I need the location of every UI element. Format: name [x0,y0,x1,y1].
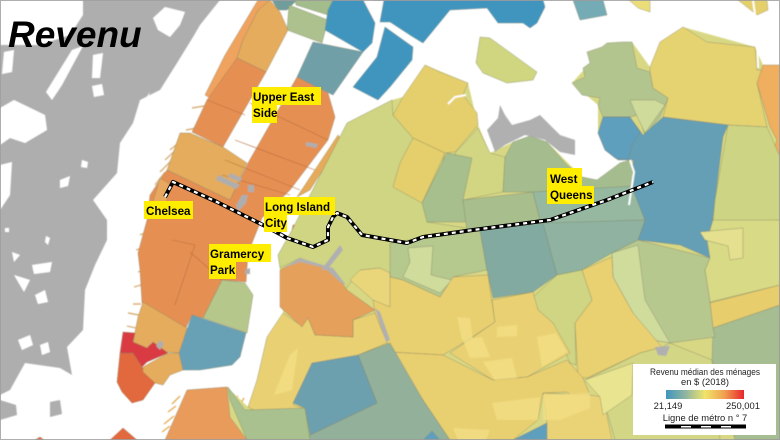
label: Upper East Side [252,87,321,123]
metro line legend: Ligne de métro n ° 7 [663,412,747,423]
river: Newtown Creek and East River inlet [448,0,758,104]
land underlay: Queens and Brooklyn [165,27,780,440]
label: West Queens: Queens [550,189,593,202]
piers: Manhattan west side [127,106,252,432]
label: West Queens: West [550,173,578,186]
title: Revenu [8,14,142,55]
label: Chelsea: Chelsea [146,205,191,218]
legend [633,364,776,435]
ramp maximum: 250,001 [726,400,760,411]
label: Long Island City: Long Island [265,201,330,214]
label: Gramercy Park [209,244,271,279]
metro line no. 7 [165,182,653,247]
districts: Manhattan [117,0,342,403]
legend subtitle: en $ (2018) [681,376,729,387]
label: Gramercy Park: Park [210,264,236,277]
label: Upper East Side: Upper East [253,91,314,104]
districts: Bronx [272,0,768,100]
district lines: Manhattan [172,100,328,305]
land: New Jersey (grey) [0,0,220,420]
legend title: Revenu médian des ménages [650,366,760,377]
label: Long Island City: City [265,217,287,230]
label: Long Island City [264,197,335,232]
label: Upper East Side: Side [253,107,278,120]
label: West Queens [547,168,594,204]
white gaps in New Jersey [0,7,185,355]
scale bar [665,424,746,428]
lighter income patches [274,317,590,440]
label: Gramercy Park: Gramercy [210,248,265,261]
districts: Queens central and Brooklyn [35,220,720,440]
colour ramp [666,390,744,399]
districts: Queens west and north [278,27,780,440]
ramp minimum: 21,149 [654,400,682,411]
grey wetlands: Jamaica area [283,105,670,356]
label: Chelsea [144,201,193,219]
grey patches: Manhattan [156,142,318,350]
